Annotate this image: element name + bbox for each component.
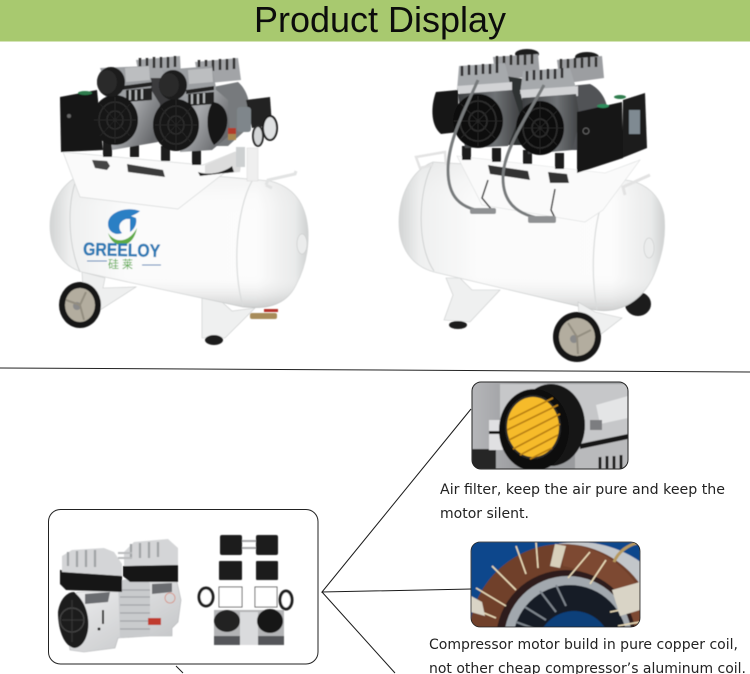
control box rear [622,93,647,158]
photo: air filter close-up [472,382,628,471]
steel hose 2 [503,85,553,220]
mount plate [63,152,235,209]
text: copper coil description [429,637,746,674]
filter background [472,382,628,471]
rear head and motor [136,56,250,146]
riser pipe [247,148,258,181]
fan 2 [516,101,564,155]
panel: pump and parts [48,510,318,664]
text: air filter description: motor silent. [440,506,529,522]
pump housing [62,580,181,652]
mount plate [457,156,640,222]
feet posts [103,141,112,157]
photo: right air compressor [399,49,665,362]
wheel [553,312,601,362]
tank [50,175,308,308]
title: Product Display [254,0,506,40]
tank handles [416,152,446,168]
motor 2 [522,94,580,154]
motor 1 [458,90,520,148]
filter cap 2 [159,70,187,100]
tank [399,162,665,311]
filter cap 1 [97,67,125,97]
photo: left air compressor [50,56,308,345]
pump assembled [58,539,181,652]
pressure switch and gauges [228,97,277,167]
front head 2 [520,68,576,94]
front foot [202,298,255,338]
connector lines [176,409,472,673]
thumbnail border [471,542,640,627]
rear motor bodies [505,76,538,145]
front motor 1 [105,88,160,150]
left switch box [432,90,459,134]
drain valve [250,309,278,319]
rear wheel [625,292,651,316]
thumbnail border [472,382,628,469]
exploded parts [199,535,292,645]
front motor 2 [172,88,230,152]
divider line [0,368,750,372]
text: copper coil description: Compressor motor build in pure copper coil, [429,637,738,653]
text: air filter description [440,482,725,522]
rear wheel support [82,272,136,310]
motor support posts [462,146,471,160]
front head 1 [457,63,510,90]
wheel [59,282,101,328]
fan 2 [153,99,199,151]
fan 1 [92,95,138,145]
header banner [0,0,750,42]
control box front [577,102,623,173]
wheel bracket [578,302,622,335]
valve wires [482,180,555,218]
photo: copper coil close-up [471,542,640,627]
fan 1 [453,94,503,148]
left foot [444,278,500,322]
logo: Greeloy: GREELOY [83,239,160,261]
control box [60,90,103,152]
logo: Greeloy [83,209,161,271]
rear heads and caps [493,49,604,84]
stator image [471,542,640,627]
steel hose 1 [448,80,490,212]
valve fittings [470,208,496,214]
text: air filter description: Air filter, keep the air pure and keep the [440,482,725,498]
logo: Greeloy: 硅莱 [108,258,136,271]
tank handle [266,171,296,188]
